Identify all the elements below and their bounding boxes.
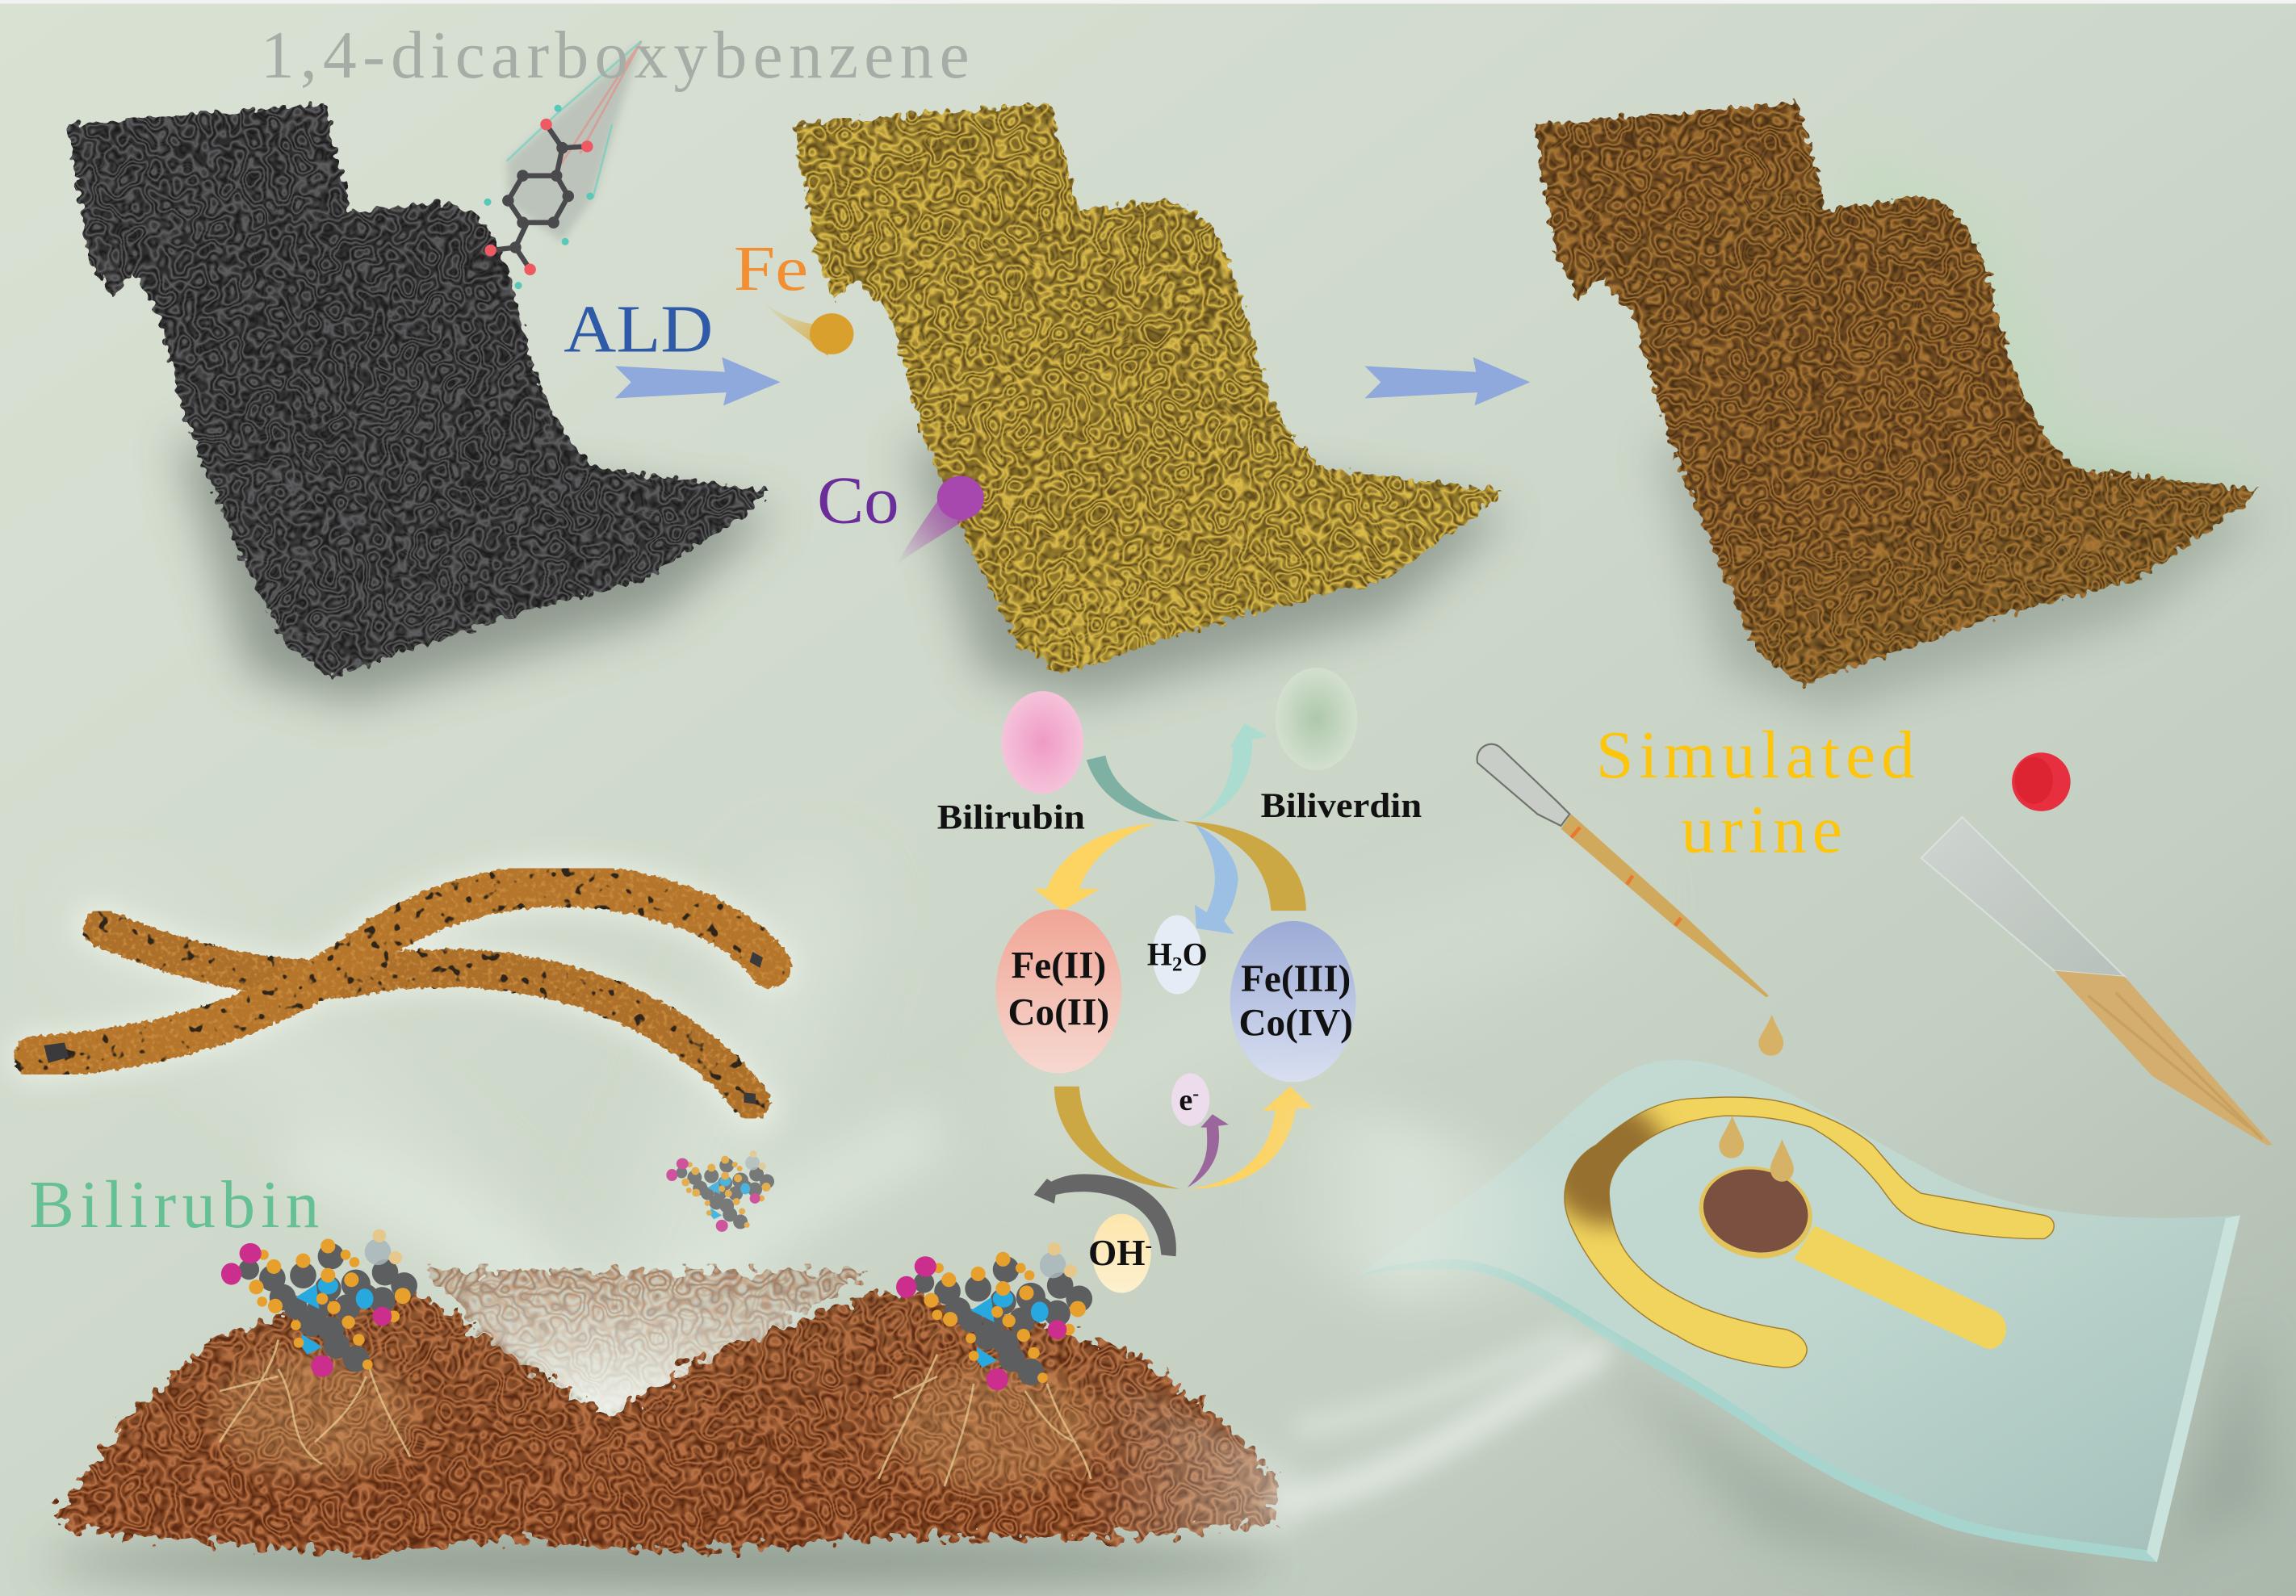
panel: calcined cloth (1535, 103, 2262, 710)
fiber ends: exposed core (44, 952, 763, 1104)
label: H2O: H (1147, 936, 1172, 972)
arrow: from Fe(II) (1054, 1087, 1180, 1189)
node: H2O (1152, 915, 1202, 995)
label: Bilirubin: Bilirubin (29, 1168, 319, 1242)
panel: bare carbon cloth (67, 106, 776, 703)
arrow: to Fe(III) (1188, 1087, 1313, 1189)
label: Fe(III) Co(IV): Fe(III) (1241, 958, 1351, 1000)
label: Bilirubin: Bilirubin (937, 798, 1085, 837)
arrow: to Fe(II) (1034, 823, 1157, 911)
label: electron: - (1192, 1083, 1199, 1104)
shadow: gold cloth (908, 439, 1508, 700)
glow: reaction veins left (216, 1340, 414, 1474)
icon: test tube (1921, 817, 2273, 1145)
fabric front: gold (826, 199, 1502, 673)
electrode: working pad (1691, 1156, 1821, 1268)
background light rays (88, 878, 1611, 1376)
substrate: glass sheet (1360, 1060, 2240, 1562)
arrow: conversion step (1364, 358, 1530, 405)
label: Fe: Fe (734, 233, 808, 304)
arrow: to water (1195, 824, 1238, 934)
icon: Fe atom (761, 300, 853, 356)
panel: fiber mat (44, 1262, 1296, 1587)
panel: MOF-coated cloth (794, 106, 1508, 700)
molecule: bilirubin right (896, 1242, 1092, 1390)
arrow: biliverdin formed (1195, 723, 1268, 822)
panel: simulated urine (1477, 718, 2273, 1145)
node: biliverdin (1276, 668, 1357, 770)
panel: single fibers (36, 886, 770, 1107)
shadow: mat (44, 1535, 1274, 1587)
molecule: bilirubin left (221, 1229, 417, 1377)
substrate: front edge (1360, 1259, 2160, 1562)
coating: brown disc (1695, 1160, 1816, 1262)
fabric back: brown (1535, 103, 1828, 299)
mat: faded back (425, 1271, 867, 1411)
node: Fe(II) Co(II) (995, 909, 1121, 1073)
node: electron (1171, 1073, 1209, 1126)
molecule: 1,4-dicarboxybenzene (484, 41, 641, 289)
arrow: bilirubin consumed (1087, 756, 1180, 822)
label: Co: Co (817, 464, 899, 538)
label: Fe(II) Co(II): Co(II) (1008, 992, 1109, 1034)
electrode: counter (1546, 1097, 2054, 1368)
panel: sensor chip (1259, 1060, 2269, 1596)
shadow: chip (1596, 1317, 2269, 1596)
glow: green halo (1845, 146, 2255, 586)
fabric back: black (67, 106, 351, 299)
node: bilirubin (1002, 691, 1083, 794)
icon: drops on chip (1719, 1116, 1794, 1182)
shadow: brown cloth (1655, 439, 2262, 710)
arrow: hydroxide (1034, 1174, 1176, 1256)
arrow: from Fe(III) (1184, 822, 1306, 911)
arrow: electron release (1188, 1114, 1229, 1188)
label: Fe(III) Co(IV): Co(IV) (1238, 1002, 1353, 1044)
fabric front: black (123, 202, 769, 677)
label: Simulated urine: urine (1681, 794, 1848, 868)
shadow: bare cloth (176, 439, 776, 703)
label: Fe(II) Co(II): Fe(II) (1011, 945, 1106, 987)
electrode: working stem (1794, 1225, 2006, 1349)
arrow: ALD step (615, 358, 781, 405)
mist: right edge (1083, 1362, 1296, 1552)
glow: fibers (36, 886, 770, 1107)
heading: 1,4-dicarboxybenzene: 1,4-dicarboxybenzene (261, 19, 970, 93)
label: ALD: ALD (564, 292, 713, 367)
molecule: bilirubin floating (666, 1150, 774, 1232)
mat: front (47, 1292, 1277, 1555)
label: Biliverdin: Biliverdin (1261, 786, 1422, 825)
icon: pipette (1477, 744, 1769, 997)
light swooshes (1288, 1335, 1596, 1501)
label: Simulated urine: Simulated (1596, 718, 1921, 793)
icon: falling drop (1758, 1015, 1783, 1056)
label: H2O: 2 (1172, 953, 1183, 976)
substrate: right edge (2147, 1215, 2240, 1562)
node: hydroxide (1092, 1214, 1151, 1293)
label: hydroxide: OH (1088, 1233, 1146, 1273)
glow: reaction veins right (878, 1355, 1101, 1489)
node: Fe(III) Co(IV) (1230, 921, 1356, 1082)
fabric back: gold (794, 106, 1079, 299)
fiber: front (36, 886, 770, 1058)
panel: catalytic cycle (937, 668, 1422, 1293)
label: H2O: O (1183, 936, 1208, 972)
fiber: rear (103, 928, 751, 1101)
fabric front: brown (1576, 196, 2258, 685)
label: hydroxide: - (1146, 1234, 1152, 1257)
light wash: sheet left (1259, 1098, 1589, 1303)
label: electron: e (1179, 1083, 1192, 1117)
icon: tube cap (2012, 752, 2071, 811)
mist: V fold (417, 1262, 878, 1418)
icon: Co atom (896, 475, 984, 565)
